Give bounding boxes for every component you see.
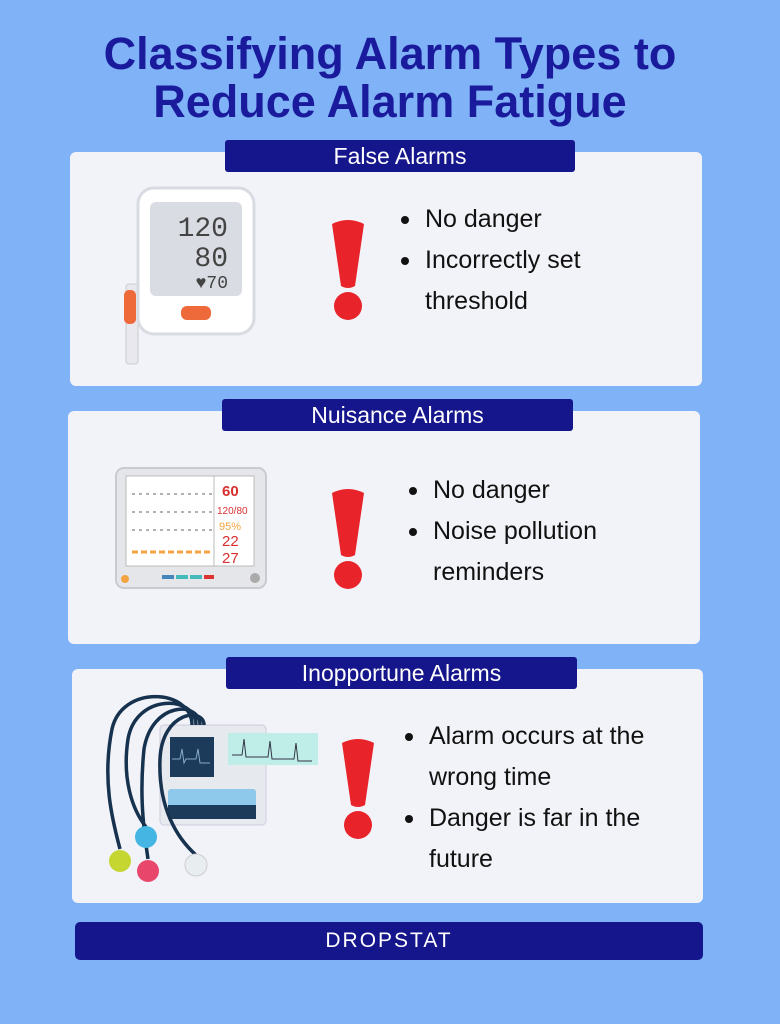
icon: patient monitor: [115, 467, 267, 589]
bullets: Noise pollution: [433, 517, 597, 545]
label: inopportune alarms: [226, 657, 577, 689]
panel: nuisance alarms: [68, 411, 700, 644]
icon: exclamation: [332, 489, 364, 589]
icon: patient monitor: 120/80: [217, 506, 248, 517]
panel: false alarms: [70, 152, 702, 386]
icon: blood pressure monitor: 120: [178, 214, 228, 245]
bullets: reminders: [433, 558, 544, 586]
icon: blood pressure monitor: 80: [194, 244, 228, 275]
icon: patient monitor: 95%: [219, 521, 241, 533]
bullets: wrong time: [429, 763, 551, 791]
bullets: [405, 722, 644, 873]
bullets: Alarm occurs at the: [429, 722, 644, 750]
bullets: Danger is far in the: [429, 804, 640, 832]
bullets: Incorrectly set: [425, 246, 581, 274]
label: false alarms: [225, 140, 575, 172]
icon: ECG machine: [106, 694, 318, 882]
icon: exclamation: [342, 739, 374, 839]
label: false alarms: False Alarms: [334, 143, 466, 169]
icon: patient monitor: 60: [222, 483, 239, 500]
label: nuisance alarms: Nuisance Alarms: [311, 402, 484, 428]
label: nuisance alarms: [222, 399, 573, 431]
bullets: future: [429, 845, 493, 873]
bullets: [401, 205, 581, 315]
icon: exclamation: [332, 220, 364, 320]
footer: dropstat: [75, 922, 703, 960]
panel: inopportune alarms: [72, 669, 703, 903]
icon: patient monitor: 27: [222, 550, 239, 567]
icon: blood pressure monitor: [124, 186, 256, 364]
label: inopportune alarms: Inopportune Alarms: [302, 660, 501, 686]
icon: blood pressure monitor: ♥70: [196, 274, 228, 294]
bullets: threshold: [425, 287, 528, 315]
icon: patient monitor: 22: [222, 533, 239, 550]
title: Reduce Alarm Fatigue: [153, 76, 627, 127]
bullets: No danger: [425, 205, 542, 233]
bullets: No danger: [433, 476, 550, 504]
title: Classifying Alarm Types to: [104, 28, 676, 79]
title: [104, 28, 676, 127]
bullets: [409, 476, 597, 586]
footer: dropstat: DROPSTAT: [325, 929, 453, 952]
